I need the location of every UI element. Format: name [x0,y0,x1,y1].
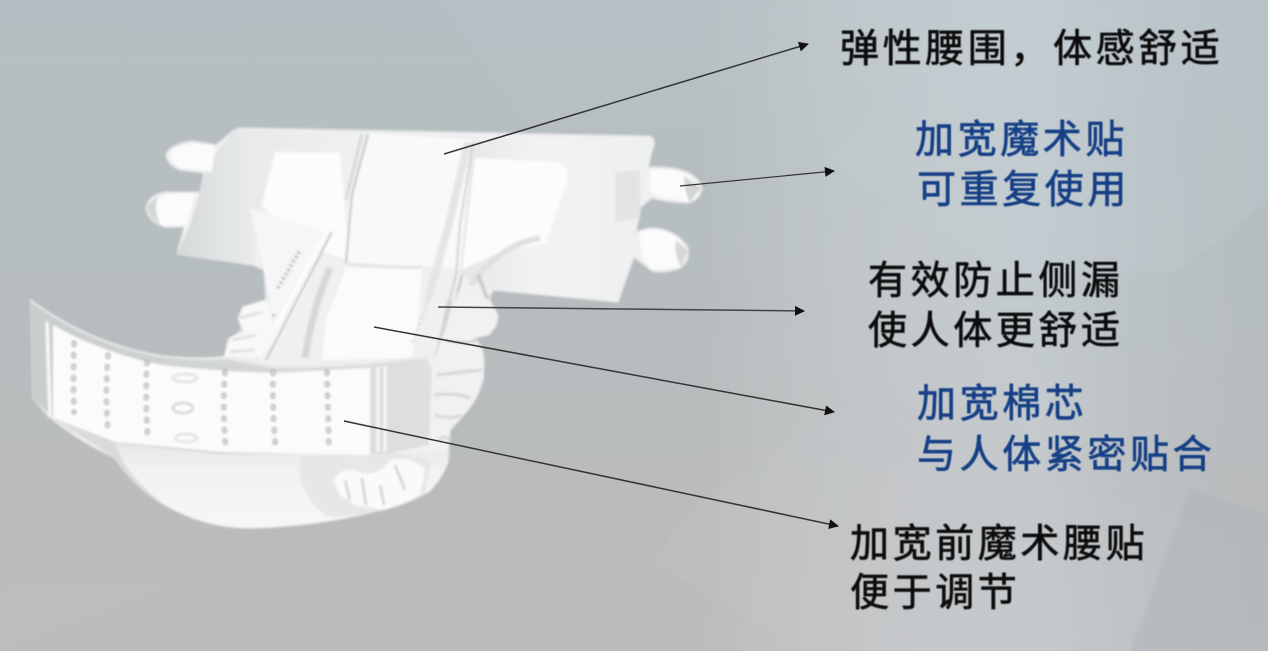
label: elastic waist: 弹性腰围，体感舒适 [840,28,1223,71]
label: wide front strip [850,523,1148,615]
gathered leg cuffs [224,292,497,470]
leak guards and ruffles [250,134,540,372]
arrow: front waist strip [344,421,838,526]
arrow: leak guard [438,307,804,311]
label: wide absorbent core [917,383,1215,477]
arrow: absorbent core [374,327,834,412]
label: wide reusable tabs: 可重复使用 [917,169,1130,212]
label: wide front strip: 加宽前魔术腰贴 [850,523,1148,566]
bottom gather [333,459,425,510]
diaper silhouette with tabs [31,128,702,528]
arrow: fastening tab [680,171,834,186]
side pads [262,152,568,270]
central absorbent core [322,133,473,360]
fastening tabs [147,144,701,270]
diaper illustration [30,128,702,528]
label: wide reusable tabs: 加宽魔术贴 [915,119,1128,162]
front hook-and-loop strip [47,322,385,455]
waist sheet shading [177,130,654,302]
label: wide absorbent core: 与人体紧密贴合 [917,434,1215,477]
strip print pattern [74,343,329,452]
label: wide reusable tabs [915,119,1130,212]
label: wide absorbent core: 加宽棉芯 [917,383,1087,426]
arrow: elastic waist [444,44,808,154]
front waist panel [30,300,432,454]
bottom cup [60,423,448,528]
label: wide front strip: 便于调节 [850,572,1020,615]
label: side leak protection [868,260,1124,353]
label: side leak protection: 有效防止侧漏 [868,260,1124,303]
label: side leak protection: 使人体更舒适 [868,310,1124,353]
